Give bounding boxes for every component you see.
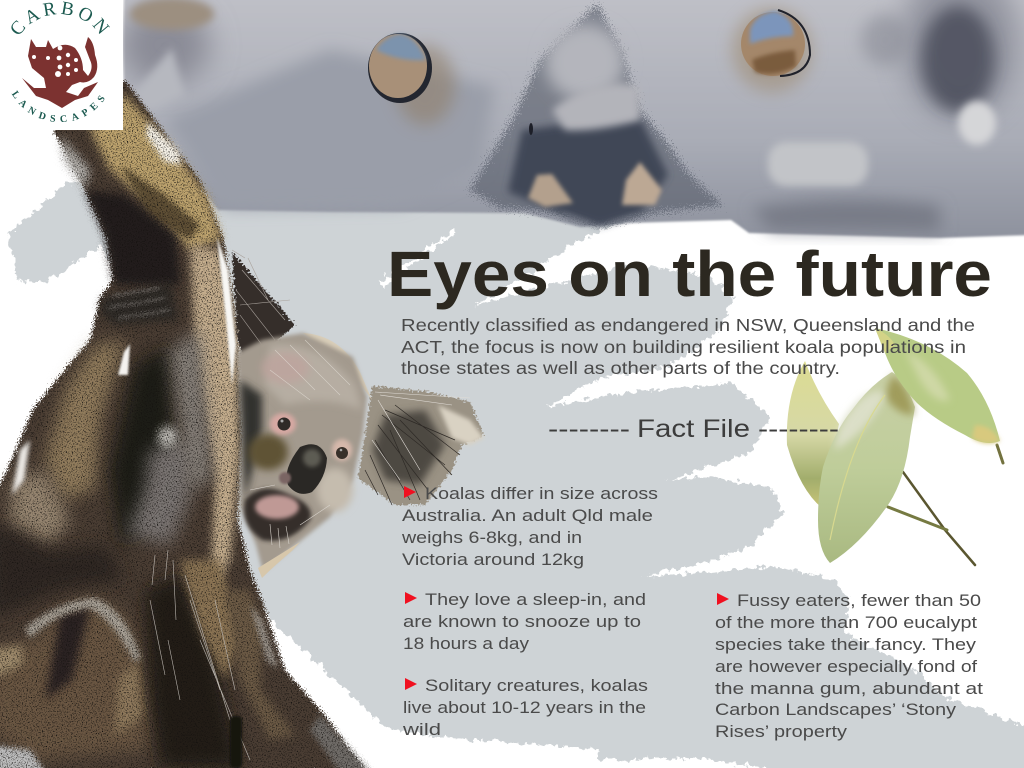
koala right ear (358, 386, 484, 505)
illustration: koala hanging from tree (0, 80, 484, 768)
fact: lifespan: Solitary creatures, koalas (425, 676, 648, 695)
intro text: Recently classified as endangered in NSW, Queensland and the (401, 315, 975, 335)
body: fine hairs (150, 550, 250, 760)
arm: tan band (90, 95, 222, 250)
fact: size (401, 484, 658, 569)
fact: diet: Carbon Landscapes’ ‘Stony (715, 700, 957, 719)
heading: Fact File: -------- (758, 415, 839, 443)
koala head (237, 333, 372, 578)
arm: cream highlight (146, 122, 182, 165)
snout and nose (470, 4, 722, 226)
illustration: gum leaves (787, 328, 1003, 565)
dark patch right (922, 6, 994, 110)
fact: sleep: 18 hours a day (403, 634, 530, 653)
logo: Carbon Landscapes (11, 0, 123, 130)
fact: size: Australia. An adult Qld male (402, 506, 653, 525)
right eye (732, 8, 812, 92)
title: Eyes on the future (387, 238, 992, 310)
koala mouth (244, 489, 311, 541)
intro text: those states as well as other parts of the country. (401, 358, 840, 378)
arm: tan hair (190, 245, 240, 600)
tree stub (230, 716, 242, 768)
icon: middle leaf (818, 372, 915, 563)
illustration: koala face close-up (120, 0, 1024, 238)
icon: stems (888, 445, 1003, 565)
dark shoulder wedge (0, 520, 125, 620)
upper-left shading (120, 5, 210, 85)
fact: diet: Fussy eaters, fewer than 50 (737, 591, 981, 610)
intro text (401, 315, 975, 378)
left forearm tan (45, 340, 125, 500)
fact: lifespan: live about 10-12 years in the (403, 698, 646, 717)
koala left ear (232, 250, 295, 365)
central dark (145, 575, 240, 768)
heading: Fact File: Fact File (637, 415, 750, 443)
arm: dark core (85, 190, 180, 285)
background: grey brush strokes (8, 183, 1024, 768)
fact: size: Koalas differ in size across (425, 484, 658, 503)
fact: diet: the manna gum, abundant at (715, 679, 983, 698)
fact: diet (715, 591, 983, 741)
koala body (0, 80, 366, 768)
logo icon: quoll (22, 37, 98, 108)
heading: Fact File (548, 415, 839, 443)
fact: diet: are however especially fond of (715, 657, 977, 676)
fact: diet: species take their fancy. They (715, 635, 977, 654)
fact: lifespan (402, 676, 648, 739)
icon: back leaf (787, 361, 839, 508)
koala eyes (270, 413, 296, 435)
arm white strip (217, 237, 236, 385)
heading: Fact File: -------- (548, 415, 630, 443)
knee (0, 598, 150, 760)
tan down right (180, 560, 240, 680)
darker lower wash (166, 50, 495, 208)
intro text: ACT, the focus is now on building resilient koala populations in (401, 337, 966, 357)
fact: sleep: They love a sleep-in, and (425, 590, 646, 609)
fact: diet: of the more than 700 eucalypt (715, 613, 977, 632)
fact: lifespan: wild (402, 720, 441, 739)
fact: diet: Rises’ property (715, 722, 848, 741)
fact: sleep: are known to snooze up to (403, 612, 641, 631)
logo wordmark bottom: LANDSCAPES (12, 90, 104, 122)
icon: right leaf (875, 328, 1000, 443)
left eye (368, 33, 455, 125)
dark core body (110, 345, 175, 545)
koala nose (286, 444, 327, 494)
fact: size: Victoria around 12kg (402, 550, 584, 569)
fact: size: weighs 6-8kg, and in (401, 528, 582, 547)
fact: sleep (403, 590, 646, 653)
wrist folds (100, 282, 178, 325)
grey chest (128, 440, 195, 545)
